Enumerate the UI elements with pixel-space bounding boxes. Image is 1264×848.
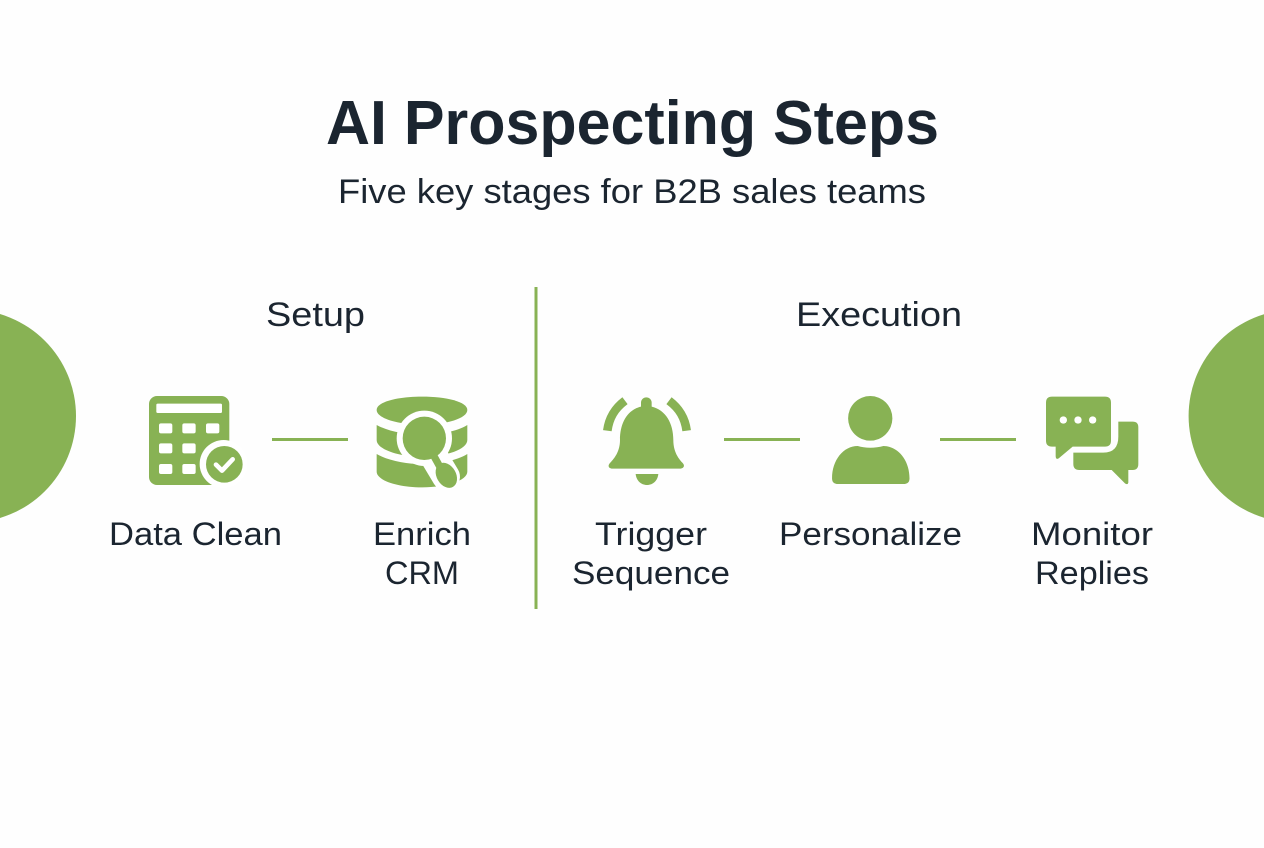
subtitle: Five key stages for B2B sales teams bbox=[338, 173, 926, 211]
label: data clean: Data Clean bbox=[109, 516, 282, 552]
label: monitor replies bbox=[1031, 516, 1153, 591]
label: trigger sequence: Sequence bbox=[572, 555, 730, 591]
panel: setup bbox=[109, 296, 471, 591]
label: personalize: Personalize bbox=[779, 516, 962, 552]
icon: chat bubbles bbox=[1046, 397, 1138, 484]
label: trigger sequence: Trigger bbox=[595, 516, 707, 552]
connector: data clean to enrich bbox=[272, 438, 348, 441]
panel: execution bbox=[572, 296, 1153, 591]
decorative circle: left bbox=[0, 310, 76, 522]
label: monitor replies: Replies bbox=[1035, 555, 1149, 591]
label: enrich crm: CRM bbox=[385, 555, 459, 591]
title: AI Prospecting Steps bbox=[326, 89, 939, 158]
icon: person bbox=[832, 396, 910, 484]
label: enrich crm bbox=[373, 516, 471, 591]
divider between setup and execution bbox=[534, 287, 538, 609]
label: monitor replies: Monitor bbox=[1031, 516, 1153, 552]
label: trigger sequence bbox=[572, 516, 730, 591]
icon: database with magnifier bbox=[377, 397, 467, 492]
decorative circle: right bbox=[1189, 310, 1264, 522]
connector: trigger to personalize bbox=[724, 438, 800, 441]
icon: calendar with check bbox=[149, 396, 248, 488]
connector: personalize to monitor bbox=[940, 438, 1016, 441]
label: enrich crm: Enrich bbox=[373, 516, 471, 552]
icon: bell bbox=[607, 397, 687, 485]
heading: setup: Setup bbox=[266, 296, 365, 334]
heading: execution: Execution bbox=[796, 296, 962, 334]
